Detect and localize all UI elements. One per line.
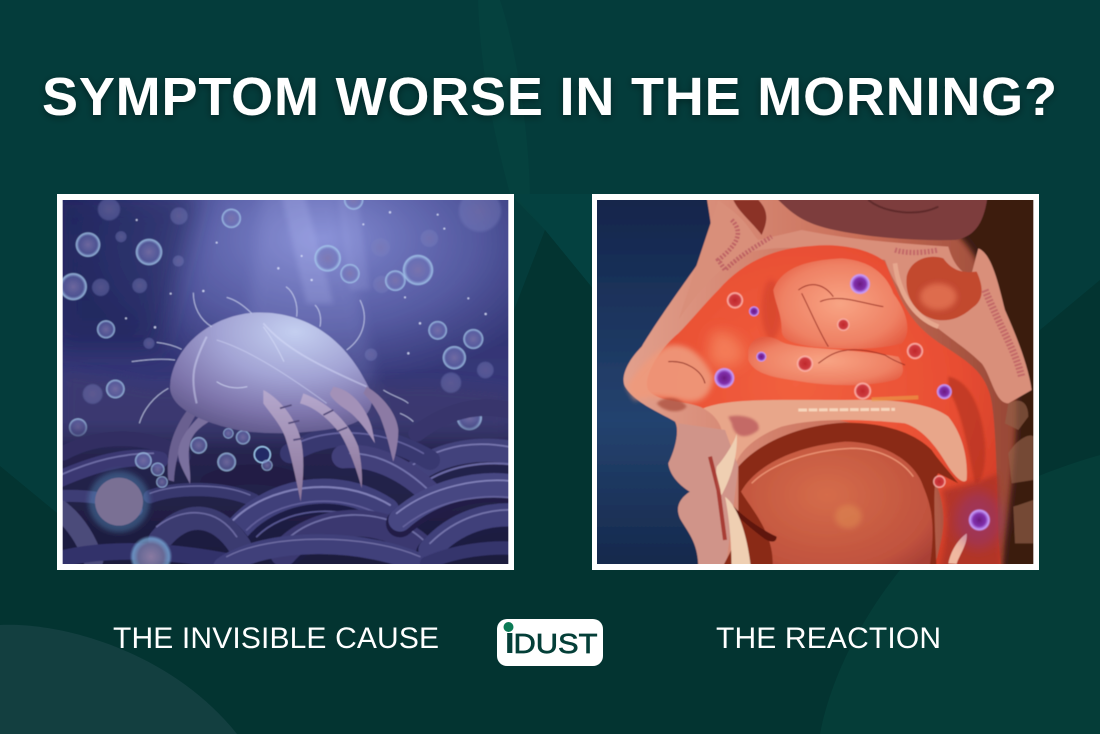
mouth slit bbox=[733, 506, 778, 542]
logo: iDUST bbox=[497, 619, 603, 666]
floating bubbles back bbox=[82, 188, 503, 405]
lips and teeth bbox=[716, 433, 752, 575]
large blurred bubble bbox=[88, 471, 172, 578]
allergen particles bbox=[714, 273, 991, 531]
faded fabric haze bbox=[358, 384, 382, 422]
throat folds bbox=[948, 377, 985, 483]
title: SYMPTOM WORSE IN THE MORNING? bbox=[42, 67, 1057, 127]
panel: dust mite image bbox=[50, 188, 520, 578]
head silhouette bbox=[622, 200, 1033, 564]
floating bubbles front bbox=[59, 190, 484, 437]
neck and back of head bbox=[958, 200, 1034, 564]
fabric fibres bbox=[50, 408, 520, 575]
brain bbox=[778, 200, 988, 241]
lower face tissue bbox=[668, 423, 738, 575]
backdrop bbox=[62, 200, 508, 449]
sinus bbox=[906, 257, 982, 320]
mite hairs bbox=[132, 287, 413, 423]
backdrop bbox=[597, 200, 712, 564]
body texture bbox=[193, 323, 367, 403]
tongue bbox=[741, 442, 933, 575]
bone layer bbox=[696, 222, 1032, 404]
mite front legs bbox=[263, 387, 398, 502]
panel: nasal cross-section image bbox=[585, 190, 1055, 575]
caption: the invisible cause: THE INVISIBLE CAUSE bbox=[113, 622, 439, 655]
mouth cavity bbox=[718, 423, 958, 575]
logo: iDUST: DUST bbox=[514, 628, 598, 659]
mite back legs bbox=[167, 411, 208, 484]
turbinates bbox=[773, 258, 907, 349]
nose tip tissue bbox=[627, 345, 713, 402]
throat glow bbox=[955, 492, 1002, 548]
palate bbox=[703, 400, 967, 481]
inflamed patches bbox=[708, 332, 745, 367]
mite body bbox=[170, 312, 372, 433]
caption: the reaction: THE REACTION bbox=[716, 622, 941, 655]
logo: iDUST: i bbox=[504, 620, 515, 662]
specks bbox=[125, 211, 487, 354]
nasal cavity bbox=[647, 245, 1002, 575]
small bubbles near legs bbox=[135, 428, 273, 488]
